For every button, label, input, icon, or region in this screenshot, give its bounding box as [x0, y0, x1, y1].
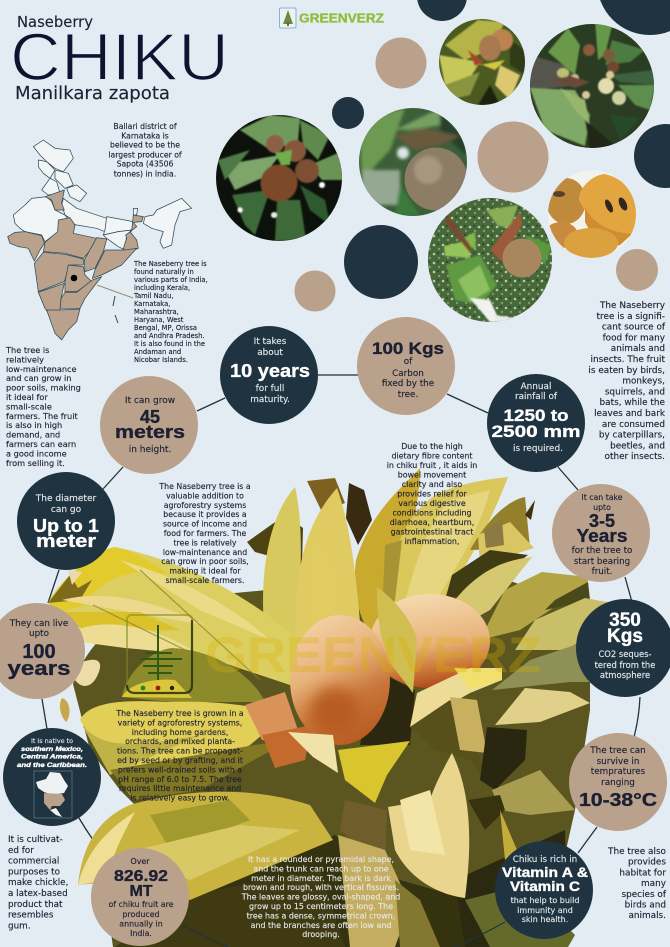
- text: agroforestry: small-scale farmers.: [166, 576, 244, 585]
- stat: rainfall: 2500 mm: [492, 422, 580, 441]
- text: dietary fibre: in chiku fruit , it aids in: [387, 461, 477, 470]
- stat: 100 years: 100: [22, 641, 56, 663]
- fruit: left: [290, 615, 390, 745]
- stat: carbon: fixed by the: [382, 379, 434, 389]
- text: habitat: birds and: [625, 900, 666, 910]
- text: low maintenance: [5, 345, 81, 468]
- text: agroforestry: can grow in poor soils,: [161, 557, 249, 566]
- text: habitat: habitat for: [619, 868, 666, 878]
- text: Ballari: believed to be the: [110, 141, 180, 150]
- text: grown in: tions. The tree can be propagat-: [117, 747, 243, 756]
- stat: bearing fruit: It can take: [581, 493, 623, 502]
- text: appearance: grow up to 15 centimeters long. The: [249, 902, 393, 911]
- text: dietary fibre: provides relief for: [397, 490, 468, 498]
- lower left foreground leaf: [78, 792, 333, 900]
- text: cultivated: purposes to: [8, 867, 60, 877]
- text: grown in: pH range of 6.0 to 7.5. The tree: [118, 775, 242, 784]
- text: agroforestry: [158, 482, 251, 585]
- photo: fruits on branch: [216, 115, 345, 241]
- bottom connectors: [182, 922, 505, 947]
- text: dietary fibre: clarity and also: [402, 480, 462, 489]
- text: food source: bats, while the: [600, 398, 665, 408]
- text: food source: squirrels, and: [605, 387, 665, 397]
- text: low maintenance: farmers. The fruit: [6, 411, 79, 421]
- stat: carbon: of: [404, 357, 413, 367]
- stat: carbon: 100 Kgs: [372, 339, 444, 358]
- text: Ballari: largest producer of: [108, 150, 182, 160]
- text: low maintenance: relatively: [6, 354, 44, 364]
- text: food source: monkeys,: [622, 377, 665, 387]
- stat: production: of chiku fruit are: [108, 900, 174, 909]
- stat: 10 years: [220, 326, 318, 424]
- text: native range: Bengal, MP, Orissa: [134, 324, 197, 332]
- text: native range: [133, 260, 208, 364]
- text: appearance: The leaves are glossy, oval-shaped, and: [241, 893, 400, 902]
- stat: vitamins: Vitamin A &: [502, 864, 588, 880]
- text: native range: including Kerala,: [134, 284, 190, 292]
- text: dietary fibre: dietary fibre content: [391, 452, 473, 460]
- text: food source: is eaten by birds,: [588, 366, 665, 376]
- text: native range: various parts of India,: [134, 276, 208, 284]
- text: Ballari: Karnataka is: [121, 132, 169, 140]
- map marker: [71, 275, 133, 323]
- orange blotches: [245, 692, 298, 745]
- text: dietary fibre: various digestive: [398, 499, 466, 508]
- stat: native range: It is native to: [31, 737, 73, 745]
- stat: temperature: ranging: [601, 778, 635, 788]
- text: grown in: The Naseberry tree is grown in a: [115, 709, 244, 718]
- stat: production: annually in: [119, 920, 163, 928]
- text: low maintenance: it ideal for: [6, 392, 48, 402]
- photo: fruit among mottled foliage: [428, 198, 552, 322]
- text: appearance: [241, 855, 400, 939]
- stat: 45 meters: [100, 376, 198, 474]
- text: habitat: many: [641, 879, 666, 889]
- text: cultivated: product that: [8, 900, 63, 910]
- stat: vitamins: [495, 841, 593, 939]
- stat: bearing fruit: [552, 484, 650, 582]
- text: appearance: meter in diameter. The bark is dark: [251, 874, 391, 883]
- stat: temperature: tempratures: [591, 767, 646, 777]
- text: food source: leaves and bark: [594, 409, 666, 419]
- stat: carbon: tree.: [398, 390, 418, 400]
- title block: [10, 13, 229, 104]
- stat: production: MT: [129, 883, 153, 900]
- text: agroforestry: tree is relatively: [173, 538, 237, 547]
- text: low maintenance: demand, and: [6, 430, 60, 440]
- stat: CO2: CO2 seques-: [598, 649, 652, 659]
- photo: cut sapota fruits: [544, 170, 638, 258]
- text: habitat: The tree also: [607, 847, 666, 857]
- upper back leaves: [307, 478, 345, 512]
- stat: vitamins: immunity and: [517, 906, 573, 915]
- logo: Greenverz: [280, 8, 384, 28]
- text: cultivated: make chickle,: [8, 878, 68, 888]
- text: appearance: brown and rough, with vertical fissures.: [243, 883, 399, 892]
- text: grown in: orchards, and mixed planta-: [125, 737, 235, 746]
- text: native range: Andaman and: [134, 348, 181, 356]
- title: Manilkara zapota: Manilkara zapota: [15, 83, 170, 104]
- stat: bearing fruit: fruit.: [592, 567, 612, 577]
- stat: 10 years: maturity.: [250, 395, 290, 405]
- text: low maintenance: poor soils, making: [6, 383, 81, 393]
- text: native range: found naturally in: [134, 268, 194, 276]
- text: dietary fibre: conditions including: [392, 508, 472, 518]
- stat: 10 years: 10 years: [230, 361, 310, 381]
- text: appearance: drooping.: [302, 930, 340, 939]
- stat: 10 years: about: [257, 348, 283, 358]
- stat: diameter: [17, 472, 115, 570]
- icon: North America map: [34, 771, 72, 818]
- stat: temperature: 10-38°C: [579, 790, 657, 810]
- dark gap behind fruits: [360, 670, 415, 745]
- text: habitat: provides: [628, 858, 666, 868]
- text: appearance: It has a rounded or pyramidal shape,: [248, 855, 394, 864]
- stat: CO2: 350: [609, 610, 641, 631]
- fruit: right: [370, 594, 490, 688]
- text: agroforestry: valuable addition to: [166, 491, 244, 500]
- stat: 100 years: They can live: [9, 619, 68, 629]
- title: CHIKU: CHIKU: [10, 20, 229, 95]
- stat: 100 years: [0, 603, 85, 699]
- text: grown in: [115, 709, 244, 803]
- text: food source: by caterpillars,: [599, 431, 665, 441]
- text: habitat: [607, 847, 667, 921]
- stat: vitamins: Chiku is rich in: [513, 855, 577, 865]
- text: food source: other insects.: [605, 452, 665, 462]
- text: food source: insects. The fruit: [591, 355, 666, 365]
- left leaves: [48, 547, 305, 690]
- text: agroforestry: agroforestry systems: [164, 501, 246, 510]
- stat: bearing fruit: upto: [593, 503, 611, 512]
- photo: fruit in yellow leaves: [439, 19, 525, 105]
- text: food source: The Naseberry: [599, 301, 665, 311]
- stat: bearing fruit: 3-5: [589, 511, 615, 531]
- watermark logo: [127, 615, 541, 693]
- stat: CO2: Kgs: [607, 626, 643, 647]
- stat: production: [91, 848, 189, 946]
- text: low maintenance: is also in high: [6, 420, 62, 430]
- text: native range: Tamil Nadu,: [133, 292, 174, 300]
- upper left foreground leaf: [80, 701, 285, 795]
- title: Naseberry: Naseberry: [17, 13, 93, 31]
- stat: temperature: [569, 733, 667, 831]
- text: native range: Nicobar Islands.: [134, 356, 188, 364]
- text: native range: Haryana, West: [134, 316, 184, 324]
- text: agroforestry: because it provides a: [163, 510, 247, 519]
- text: agroforestry: food for farmers. The: [164, 529, 247, 538]
- text: native range: Karnataka,: [134, 300, 170, 308]
- text: Ballari: tonnes) in India.: [114, 169, 176, 178]
- photo: flowers and buds: [530, 20, 655, 150]
- text: agroforestry: The Naseberry tree is a: [158, 482, 251, 491]
- stat: rainfall: 1250 to: [504, 406, 568, 425]
- text: agroforestry: low-maintenance and: [163, 548, 247, 557]
- text: food source: food for many: [603, 333, 665, 343]
- text: dietary fibre: [387, 442, 477, 546]
- photo: rough round fruit: [359, 108, 468, 216]
- text: habitat: animals.: [628, 911, 666, 921]
- stat: native range: [3, 728, 101, 826]
- text: dietary fibre: inflammation,: [405, 537, 459, 546]
- stat: production: produced: [122, 910, 160, 919]
- stat: 100 years: years: [8, 658, 70, 680]
- watermark logo: GREENVERZ: [205, 627, 541, 683]
- stat: native range: Central America,: [21, 754, 83, 760]
- stat: 45 meters: It can grow: [125, 396, 175, 406]
- text: dietary fibre: bowel movement: [398, 470, 466, 480]
- text: native range: It is also found in the: [134, 340, 205, 348]
- stat: rainfall: is required.: [513, 444, 563, 454]
- text: food source: beetles, and: [610, 441, 665, 451]
- text: grown in: requires little maintenance and: [119, 784, 241, 793]
- stat: bearing fruit: Years: [576, 526, 628, 546]
- stat: 45 meters: 45: [140, 407, 160, 427]
- stat: 100 years: upto: [29, 629, 49, 639]
- text: habitat: species of: [621, 890, 667, 900]
- stat: 45 meters: in height.: [129, 445, 171, 455]
- text: cultivated: resembles: [8, 911, 54, 921]
- central foreground leaves: [377, 587, 417, 693]
- text: food source: animals and: [611, 344, 665, 354]
- text: low maintenance: from selling it.: [6, 458, 65, 468]
- stat: production: Over: [131, 857, 150, 866]
- illustration: sapota plant: [48, 468, 612, 947]
- text: Ballari: Sapota (43506: [117, 160, 174, 169]
- text: native range: Maharashtra,: [134, 308, 179, 316]
- stat: vitamins: that help to build: [511, 896, 579, 905]
- text: food source: tree is a signifi-: [597, 312, 665, 322]
- text: cultivated: [8, 835, 68, 931]
- text: dietary fibre: diarrhoea, heartburn,: [390, 518, 474, 527]
- stat: native range: and the Caribbean.: [17, 762, 87, 769]
- text: grown in: including home gardens,: [132, 728, 228, 737]
- stat: native range: southern Mexico,: [21, 746, 83, 753]
- stat: production: India.: [130, 929, 152, 938]
- text: food source: are consumed: [602, 420, 665, 430]
- stat: 10 years: for full: [256, 384, 284, 394]
- text: cultivated: ed for: [8, 846, 34, 856]
- text: low maintenance: low-maintenance: [6, 364, 77, 374]
- text: agroforestry: making it ideal for: [169, 567, 241, 576]
- stat: carbon: Carbon: [392, 369, 424, 379]
- text: grown in: variety of agroforestry systems,: [118, 718, 242, 727]
- stat: temperature: The tree can: [589, 746, 646, 756]
- text: low maintenance: a good income: [6, 448, 67, 458]
- stat: vitamins: Vitamin C: [510, 878, 580, 894]
- text: grown in: ed by seed or by grafting, and it: [117, 756, 243, 765]
- text: dietary fibre: gastrointestinal tract: [391, 528, 473, 536]
- text: cultivated: gum.: [8, 921, 31, 931]
- stat: rainfall: rainfall of: [515, 392, 558, 402]
- stat: 45 meters: meters: [115, 422, 185, 442]
- text: native range: and Andhra Pradesh.: [134, 332, 205, 340]
- logo: Greenverz: GREENVERZ: [299, 12, 384, 26]
- text: Ballari: Ballari district of: [113, 122, 177, 131]
- text: native range: The Naseberry tree is: [133, 260, 207, 268]
- stat: production: 826.92: [114, 868, 168, 885]
- stat: vitamins: skin health.: [522, 915, 568, 924]
- text: food source: cant source of: [602, 323, 666, 333]
- text: cultivated: a latex-based: [8, 889, 68, 899]
- text: appearance: tree has a dense, symmetrical crown,: [247, 911, 395, 920]
- stat: 10 years: It takes: [254, 337, 287, 347]
- stat: CO2: tered from the: [595, 660, 655, 670]
- stat: bearing fruit: start bearing: [574, 557, 630, 567]
- stat: carbon: [357, 317, 455, 415]
- text: low maintenance: small-scale: [6, 401, 52, 411]
- text: grown in: prefers well-drained soils with a: [118, 765, 242, 774]
- text: cultivated: It is cultivat-: [8, 835, 63, 845]
- text: dietary fibre: Due to the high: [401, 442, 463, 451]
- text: grown in: is relatively easy to grow.: [130, 794, 230, 803]
- text: low maintenance: and can grow in: [6, 373, 71, 383]
- dark foliage base: [73, 570, 590, 947]
- stat: diameter: Up to 1: [33, 516, 99, 536]
- stat: diameter: The diameter: [35, 494, 96, 504]
- map of India: [8, 140, 192, 340]
- text: food source: [588, 301, 666, 462]
- stat: diameter: meter: [36, 531, 96, 551]
- stat: bearing fruit: for the tree to: [572, 546, 632, 556]
- stat: diameter: can go: [51, 505, 82, 515]
- stat: rainfall: Annual: [521, 382, 551, 392]
- stat: CO2: [576, 599, 670, 697]
- text: cultivated: commercial: [8, 857, 59, 867]
- stat: rainfall: [487, 374, 585, 472]
- connector lines: [42, 375, 640, 860]
- text: appearance: and the trunk can reach up to one: [253, 864, 389, 873]
- text: appearance: and the branches are often low and: [251, 921, 391, 930]
- text: agroforestry: source of income and: [163, 520, 247, 529]
- decorative circles: [294, 0, 670, 312]
- text: Ballari: [108, 122, 182, 178]
- stat: temperature: survive in: [597, 757, 639, 767]
- text: low maintenance: The tree is: [5, 345, 49, 355]
- stat: CO2: atmosphere: [600, 670, 650, 680]
- text: low maintenance: farmers can earn: [6, 439, 76, 449]
